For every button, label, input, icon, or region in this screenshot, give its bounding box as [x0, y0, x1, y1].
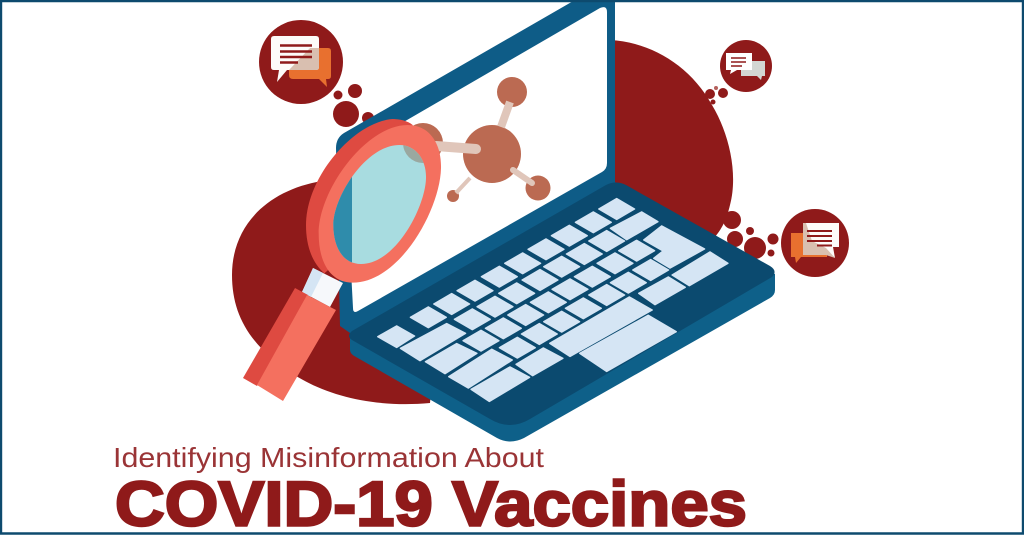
laptop screen display [345, 7, 607, 312]
dots: top left chain [333, 84, 374, 127]
icon: text lines [807, 231, 832, 246]
magnifier neck [302, 268, 343, 307]
magnifier outer ring [306, 119, 413, 273]
magnifier lens [333, 145, 426, 264]
molecule [403, 77, 550, 202]
icon: orange speech bubble [289, 48, 331, 87]
magnifier inner ring [319, 125, 441, 283]
laptop [336, 0, 775, 442]
laptop base side [350, 200, 775, 442]
blob: left red background [232, 181, 440, 404]
molecule bonds [436, 146, 476, 149]
icon: white speech bubble [271, 36, 319, 82]
laptop screen frame [336, 0, 625, 340]
icon: white speech bubble [726, 53, 752, 74]
magnifier handle [243, 288, 336, 401]
chat circle: top right [720, 40, 772, 92]
blob: right red background [600, 40, 733, 240]
molecule atoms [463, 125, 521, 183]
magnifying glass [243, 119, 443, 401]
icon: text lines [731, 58, 746, 66]
icon: orange speech bubble [791, 233, 815, 263]
icon: grey speech bubble [741, 61, 765, 80]
keyboard [377, 198, 728, 402]
title line: Identifying Misinformation About [113, 442, 544, 473]
icon: text lines [280, 46, 312, 62]
chat circle: bottom right [781, 209, 849, 277]
chat circle: top left [259, 20, 343, 104]
dots: bottom right chain [723, 211, 778, 259]
laptop base top [349, 182, 775, 425]
dots: top right chain [705, 86, 728, 104]
icon: white speech bubble [803, 223, 839, 258]
